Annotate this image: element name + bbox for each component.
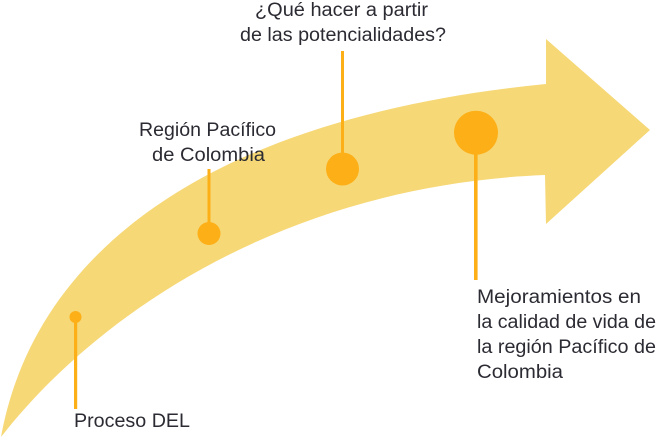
label: Mejoramientos en la calidad de vida de la región Pacífico de Colombia: Colombia [477, 362, 563, 383]
marker: large dot with stem [326, 51, 359, 186]
label: Mejoramientos en la calidad de vida de la región Pacífico de Colombia: Mejoramientos en [477, 287, 641, 308]
label: ¿Qué hacer a partir de las potencialidades? [240, 0, 446, 46]
label: Región Pacífico de Colombia: de Colombia [152, 145, 265, 166]
marker: medium dot with stem [198, 169, 220, 245]
milestone 3: ¿Qué hacer a partir de las potencialidades? [240, 0, 446, 186]
milestone 2: Región Pacífico de Colombia [139, 120, 276, 245]
label: Región Pacífico de Colombia: Región Pacífico [139, 120, 276, 141]
label: Mejoramientos en la calidad de vida de la región Pacífico de Colombia: la región Pacífico de [477, 337, 656, 358]
milestone 1: Proceso DEL [70, 311, 190, 432]
label: Mejoramientos en la calidad de vida de la región Pacífico de Colombia [477, 287, 656, 383]
marker: largest dot with stem [454, 111, 498, 280]
marker: small dot with stem [70, 311, 82, 409]
label: Proceso DEL: Proceso DEL [74, 411, 190, 432]
label: ¿Qué hacer a partir de las potencialidades?: de las potencialidades? [240, 25, 446, 46]
label: Mejoramientos en la calidad de vida de la región Pacífico de Colombia: la calidad de vida de [477, 312, 656, 333]
label: Región Pacífico de Colombia [139, 120, 276, 166]
milestone 4: Mejoramientos [454, 111, 656, 383]
label: ¿Qué hacer a partir de las potencialidades?: ¿Qué hacer a partir [255, 0, 429, 21]
